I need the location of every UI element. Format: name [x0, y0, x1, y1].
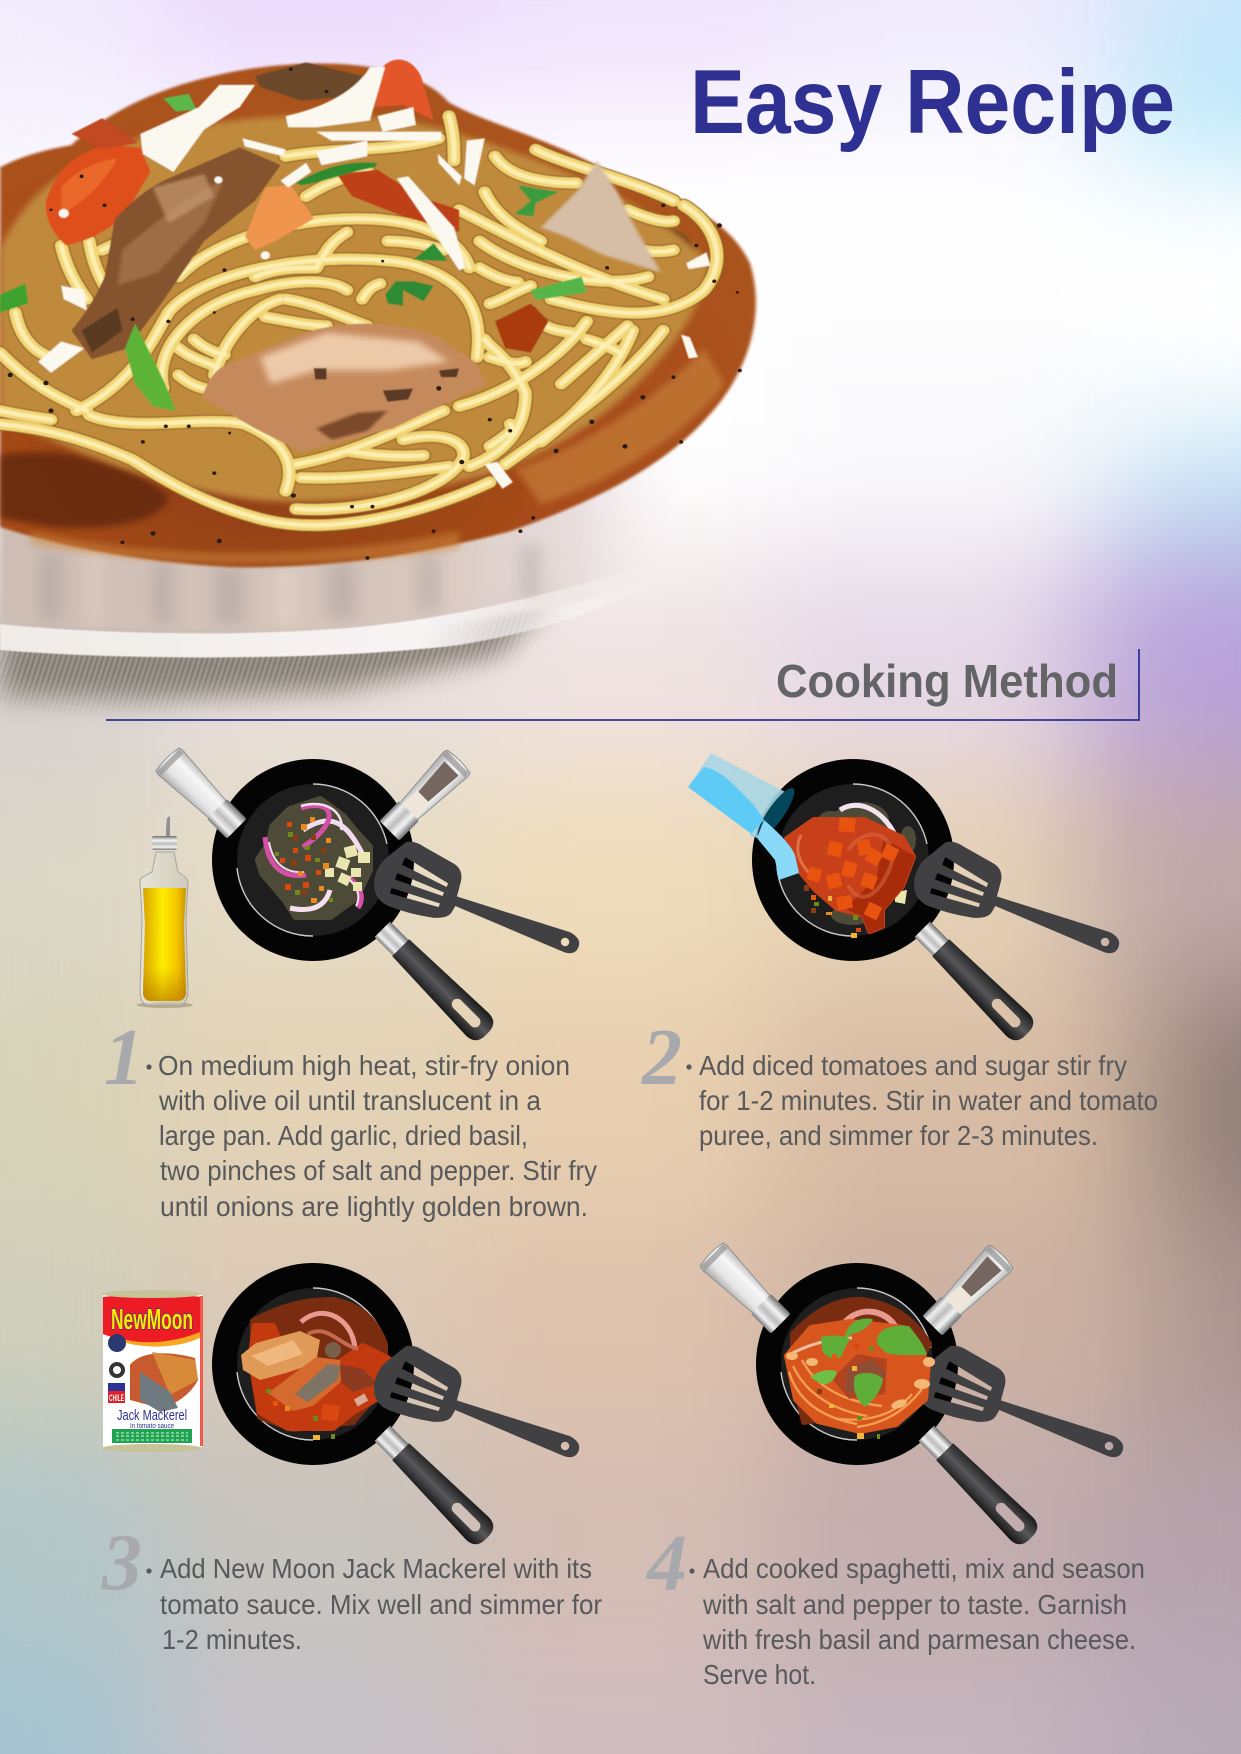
icon: pan with tomatoes — [688, 753, 1118, 1045]
step 2 text: Add diced tomatoes and sugar stir fry — [699, 1050, 1127, 1081]
right fish piece — [541, 161, 661, 272]
icon: New Moon mackerel can — [102, 1290, 203, 1452]
sauce and fish — [241, 1300, 389, 1440]
icon: pepper shaker — [920, 1243, 1015, 1338]
step 1 panel — [104, 746, 597, 1222]
icon: olive oil bottle — [137, 816, 193, 1008]
basil strips — [0, 94, 587, 411]
step 4 text: Serve hot. — [703, 1659, 816, 1690]
step 1 text: with olive oil until translucent in a — [158, 1085, 541, 1116]
icon: New Moon mackerel can: CHILE — [109, 1393, 124, 1403]
tomato chunks — [46, 59, 548, 353]
icon: pan with mackerel — [212, 1263, 578, 1549]
pasta mass behind strands — [0, 115, 709, 502]
icon: pan with finished pasta — [756, 1263, 1122, 1549]
section heading: Cooking Method — [106, 649, 1139, 720]
step 4 text: Add cooked spaghetti, mix and season — [703, 1553, 1145, 1584]
step 1 text: large pan. Add garlic, dried basil, — [159, 1120, 528, 1151]
tomato sauce and onions — [787, 802, 916, 938]
step 4 panel — [645, 1241, 1145, 1690]
step 3 text: 1-2 minutes. — [162, 1624, 302, 1655]
step 1 text: until onions are lightly golden brown. — [160, 1191, 588, 1222]
step 3 text — [146, 1553, 602, 1655]
icon: pepper shaker — [377, 748, 472, 843]
step number 3: 3 — [101, 1519, 142, 1607]
step number 4: 4 — [645, 1520, 687, 1608]
oil and onion mix — [259, 800, 370, 916]
spaghetti with basil — [786, 1300, 935, 1439]
section heading: Cooking Method: Cooking Method — [776, 655, 1118, 707]
icon: New Moon mackerel can: NewMoon — [111, 1304, 193, 1336]
step 2 text — [686, 1050, 1158, 1151]
step number 2: 2 — [641, 1014, 682, 1102]
parmesan shreds — [38, 67, 710, 489]
step 3 text: Add New Moon Jack Mackerel with its — [160, 1553, 592, 1584]
step 2 text: puree, and simmer for 2-3 minutes. — [699, 1120, 1098, 1151]
step 3 panel — [101, 1263, 602, 1655]
step 1 text — [146, 1050, 597, 1222]
spaghetti under stroke, body and highlight — [0, 116, 717, 525]
step 1 text: two pinches of salt and pepper. Stir fry — [160, 1155, 597, 1186]
mackerel fillet — [71, 62, 362, 359]
icon: glass pouring water — [688, 753, 800, 880]
step 3 text: tomato sauce. Mix well and simmer for — [160, 1589, 602, 1620]
plate — [0, 312, 761, 657]
sauce — [0, 63, 756, 567]
title: Easy Recipe — [690, 52, 1175, 153]
chicken piece — [202, 324, 487, 452]
step number 1: 1 — [104, 1014, 144, 1102]
step 1 text: On medium high heat, stir-fry onion — [158, 1050, 570, 1081]
black pepper specks — [8, 67, 742, 560]
icon: pan with onions — [212, 759, 578, 1045]
icon: New Moon mackerel can: In tomato sauce — [130, 1423, 174, 1430]
step 4 text: with fresh basil and parmesan cheese. — [702, 1624, 1136, 1655]
step 4 text: with salt and pepper to taste. Garnish — [702, 1589, 1127, 1620]
icon: New Moon mackerel can: Jack Mackerel — [117, 1407, 187, 1424]
icon: salt shaker — [154, 746, 249, 841]
step 4 text — [689, 1553, 1145, 1690]
icon: salt shaker — [698, 1241, 793, 1336]
table texture — [0, 606, 556, 717]
hero photo: plate of spaghetti — [0, 59, 761, 730]
step 2 text: for 1-2 minutes. Stir in water and tomato — [699, 1085, 1158, 1116]
step 2 panel — [641, 753, 1158, 1151]
